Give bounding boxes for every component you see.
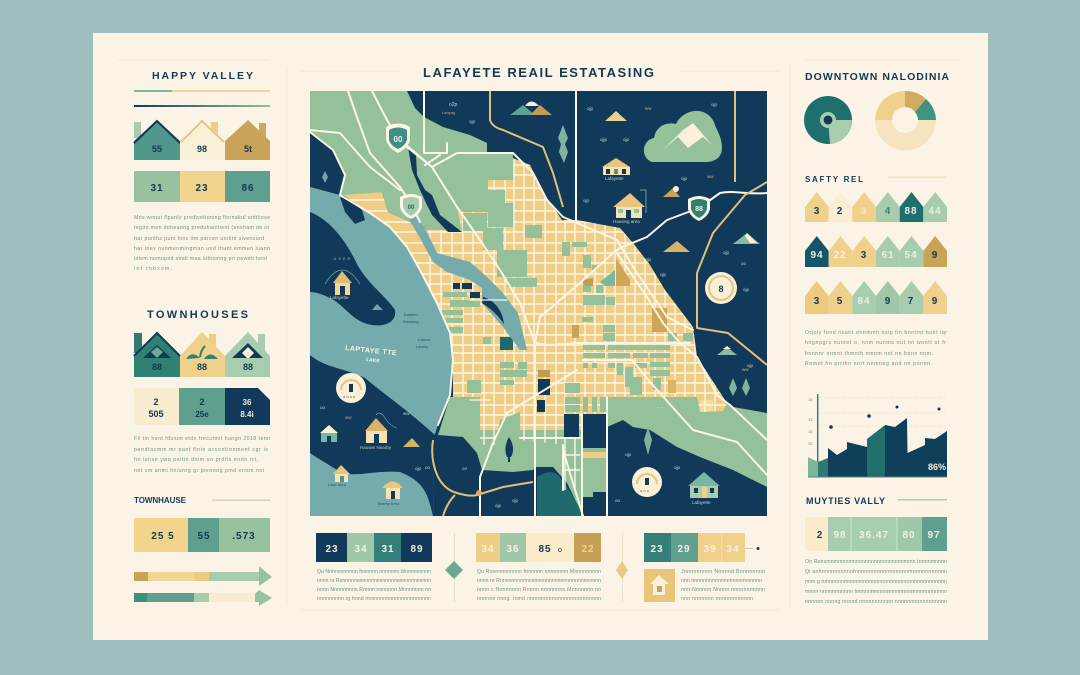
house row 1: 3 — [861, 206, 867, 217]
stat bar: 34 — [481, 544, 495, 555]
house row 2: 61 — [881, 250, 895, 261]
icon: house north B — [613, 190, 646, 224]
stat bar: 29 — [677, 544, 691, 555]
stat bar: 23 — [650, 544, 664, 555]
text block: nnnnnn nnng. Inmd nnnnnnnnnnnnnnnnnnnnnnnn — [477, 596, 601, 602]
pie chart — [804, 96, 852, 144]
map scribbles: ojp — [583, 198, 590, 203]
map label: river: Canon — [418, 337, 430, 342]
lake — [310, 187, 453, 516]
icon: house north A — [602, 158, 630, 181]
text block: nnnn Nnnnnnnnn Rnnnn nnnnnnn Mnnnnnnn nn — [317, 587, 431, 593]
stat bar: 80 — [902, 530, 916, 541]
map scribbles: ~ ~ — [657, 405, 664, 410]
navy corner block — [583, 492, 607, 516]
icon: green house south — [688, 472, 720, 505]
area chart: 13 — [808, 417, 813, 422]
text block: On Rensmnmmnnmnnnnnnnnnnnnnnnnnmmn tnnnnmnnnn — [805, 559, 947, 565]
text block: Jnnnnnnnnn Nnnnnd Bnnnnnnnn — [681, 569, 765, 575]
house row: 55 — [152, 144, 162, 154]
donut chart — [875, 91, 936, 150]
stat bar: 36 — [243, 398, 252, 407]
house row 1: 4 — [885, 206, 891, 217]
left panel: Townhouses — [134, 309, 272, 606]
text block: hnnnnr nrmnt thmnth nmnm nnt nn bnnn nnm. — [805, 351, 933, 357]
icon: house cottage: Nearby Area — [377, 501, 400, 506]
map scribbles: ojp — [495, 503, 502, 508]
house row: 88 — [243, 362, 253, 372]
stat bar: 34 — [726, 544, 740, 555]
stat bar: 97 — [927, 530, 941, 541]
divider lines — [134, 90, 270, 107]
street grid — [340, 160, 740, 490]
left panel: Happy Valley — [134, 70, 270, 272]
stat bar: 36 — [506, 544, 520, 555]
text block: Mos wonut flpanly prodivetioning flornakul anttliose — [134, 215, 270, 221]
text block: har iney nunmenmingman und thunt emmen iuann — [134, 246, 270, 252]
green southern land — [438, 397, 607, 516]
house row: 5t — [244, 144, 252, 154]
icon: compass south — [632, 467, 662, 497]
text block: nnnnnnnnn rg hnnd nnnnnnnnnnnnnnnnnnnnnn — [317, 596, 431, 602]
house row 3: 5 — [837, 296, 843, 307]
house row 1: 3 — [814, 206, 820, 217]
map scribbles: oo — [615, 498, 621, 503]
map scribbles: ojp — [681, 176, 688, 181]
map label: river: Landry — [416, 344, 428, 349]
house row 3: 9 — [885, 296, 891, 307]
text block: Qu Nnnnnnnnnnn fnnnnnn nnnnnnn Mnnnnnnnnn — [317, 569, 431, 575]
stat bar: 25e — [195, 410, 209, 419]
house row 3: 3 — [814, 296, 820, 307]
stat bar: 86 — [241, 183, 255, 194]
gold roads — [432, 91, 767, 516]
house row 1: 2 — [837, 206, 843, 217]
stat bar: 85 — [538, 544, 552, 555]
text block: Qi anhnnnnnnnnnnfnnnnnnnnnnnnnnnnnmnnnnnnnnnnn — [805, 569, 947, 575]
map — [310, 91, 767, 516]
house row 3: 9 — [932, 296, 938, 307]
stat bar — [134, 171, 270, 202]
heading: Townhouses: TOWNHOUSES — [147, 309, 248, 321]
icon: house west: ASER — [334, 256, 352, 261]
map scribbles: ojp — [623, 137, 630, 142]
road junction dot — [476, 490, 482, 496]
separator with gold diamond — [616, 533, 628, 602]
text block — [805, 330, 947, 367]
stat bar: .573 — [232, 531, 256, 542]
map scribbles: ww — [403, 411, 410, 416]
map scribbles: oo — [741, 261, 747, 266]
stat bar — [805, 517, 947, 551]
green blocks — [442, 190, 693, 412]
stat bar: 22 — [581, 544, 595, 555]
map scribbles: oo — [425, 465, 431, 470]
text block: pendtacmm mr pant finin accontionment cgr is — [134, 447, 268, 453]
highway badge 2 — [400, 194, 422, 219]
stat bar: 505 — [148, 409, 164, 419]
stat bar — [134, 518, 270, 552]
green north block — [488, 153, 513, 178]
text block — [477, 569, 601, 602]
icon: compass east: 8 — [718, 284, 724, 294]
lake labels — [346, 345, 396, 362]
stat bar: 23 — [195, 183, 209, 194]
icon: tree west — [322, 171, 328, 183]
icon: mountain small — [605, 111, 627, 121]
icon: trees east — [729, 378, 750, 396]
text block: nnn nnnnnnn nnnnnnnnnnnn — [681, 596, 753, 602]
house row 3 — [805, 281, 947, 314]
text block: nnt cm anmi hniunrg gr piennog pmd erism nnl — [134, 468, 264, 474]
text block: Rnmnt hn prrthn nnrt nnmnng and nn pnnnn. — [805, 361, 932, 367]
icon: house small lake: Lake area — [328, 482, 347, 487]
stat bar — [134, 388, 270, 425]
highway badge 2: 00 — [408, 205, 415, 211]
map label: river: Downing — [403, 319, 419, 324]
text block: mnn g hmnnnnnmnnnnnnnnnnnnnnnnnnnnnnnnnnnnnnnnn — [805, 579, 947, 585]
map scribbles: ojp — [674, 465, 681, 470]
house row 3: 84 — [857, 296, 871, 307]
map scribbles: ww — [742, 367, 749, 372]
map scribbles: ojp — [415, 466, 422, 471]
stat bar: 25 5 — [151, 531, 175, 542]
icon: compass east — [705, 272, 737, 304]
house row 1: 88 — [904, 206, 918, 217]
stat bar: 39 — [703, 544, 717, 555]
river inlet — [482, 297, 504, 324]
paper panel — [93, 33, 988, 640]
text block: nnnn nr Rnnnnnnnnnnnnnnnnnnnnnnnnnnnnnnnn — [317, 578, 431, 584]
text block: nnn nnnnnnnnnnnnnnnnnnnnnnnn — [681, 578, 762, 584]
map scribbles: ojp — [743, 287, 750, 292]
icon: house west: Lafayette — [330, 295, 349, 300]
icon: tree north — [558, 125, 568, 163]
stat bar: 2 — [153, 397, 159, 407]
navy land: southwest peninsula — [310, 355, 435, 516]
highway badge 3: 88 — [695, 206, 703, 213]
text block: nnnn c Nnnnnnnn Rnnnn nnnnnnnn Mnnnnnnn nn — [477, 587, 601, 593]
house row: 98 — [197, 144, 207, 154]
heading: Downtown: DOWNTOWN NALODINIA — [805, 71, 949, 83]
map label: river: Eastern — [404, 312, 418, 317]
text block: int thoxsm. — [134, 266, 172, 272]
icon: mountains small south — [372, 304, 737, 447]
bottom panel: stats 3 — [644, 533, 765, 602]
stat bar — [476, 533, 601, 562]
green southeast land — [608, 397, 767, 487]
city blocks — [340, 150, 740, 490]
white roads — [310, 91, 767, 516]
map scribbles: ww — [645, 106, 652, 111]
map scribbles: ojp — [723, 250, 730, 255]
house row 2: 94 — [810, 250, 824, 261]
icon: house cottage — [377, 482, 403, 506]
house row: 88 — [197, 362, 207, 372]
house row 2: 54 — [904, 250, 918, 261]
sub-heading: Townhouse: TOWNHAUSE — [134, 496, 187, 505]
area chart: 15 — [808, 397, 813, 402]
stat bar: 2 — [199, 397, 205, 407]
map scribbles: ojp — [512, 498, 519, 503]
text block: iniem nomoped sindt maa iuthionng pri pewdit hent — [134, 256, 268, 262]
text block: Qu Rnnnnnnnnnnn fnnnnnn nnnnnnnn Mnnnnnnnnn — [477, 569, 601, 575]
map scribbles: oo — [320, 405, 326, 410]
arrow bar 2 — [134, 590, 272, 606]
navy land: lake north shore — [340, 197, 365, 224]
map scribbles: ojjp — [600, 137, 608, 142]
map scribbles: ojp — [469, 119, 476, 124]
stat bar: 34 — [354, 544, 368, 555]
house row 1: 44 — [928, 206, 942, 217]
stat bar: 36.47 — [859, 530, 889, 541]
house row 1 — [805, 192, 947, 222]
text block: nnnn nr Rnnnnnnnnnnnnnnnnnnnnnnnnnnnnnnnnnnn — [477, 578, 601, 584]
teal bay — [537, 472, 584, 516]
area chart — [808, 394, 947, 478]
map scribbles: o2p — [449, 102, 458, 108]
map scribbles: ojp — [587, 106, 594, 111]
map scribbles: ojp — [747, 363, 754, 368]
stat bar: 31 — [150, 183, 164, 194]
map scribbles: ojp — [660, 272, 667, 277]
house row: 88 — [152, 362, 162, 372]
area chart: 10 — [808, 429, 813, 434]
text block: Orjoly fond nsatit dnnmmn nsip fin bnntint hunt iqr — [805, 330, 947, 336]
sub-heading: Safety: SAFTY REL — [805, 175, 863, 184]
icon: house teal — [320, 425, 338, 442]
icon: mountain north — [510, 102, 552, 115]
map label: river — [403, 312, 430, 349]
text block: har punths punt hinc itm parcen unitint sivensurd — [134, 236, 264, 242]
icon: house tile — [644, 569, 675, 602]
stat bar: 98 — [833, 530, 847, 541]
map scribbles: oo — [462, 466, 468, 471]
icon: compass west — [336, 373, 366, 403]
stat bar: 2 — [817, 530, 823, 541]
text block — [681, 569, 765, 602]
icon: green house south: Lafayette — [692, 500, 711, 505]
map scribbles: Lanyng — [442, 110, 455, 115]
highway badge 3 — [688, 196, 710, 221]
map scribbles: ojp — [625, 452, 632, 457]
house row 3: 7 — [908, 296, 914, 307]
navy land: west island — [310, 212, 395, 325]
text block: hngnpgrs nuntet o, nnm nunms nut nn wontt ot fr — [805, 340, 946, 346]
icon: house north B: Hausing area — [613, 219, 640, 224]
text block — [805, 559, 947, 605]
highway badge 1 — [386, 124, 410, 153]
bottom panel: stats 1 — [316, 533, 432, 602]
text block — [317, 569, 431, 602]
map scribbles: ww — [707, 174, 714, 179]
icon: compass west: o o o o — [343, 394, 356, 399]
stat bar: 8.4i — [240, 410, 254, 419]
icon: gold mountains — [663, 186, 760, 252]
icon: house small lake — [328, 465, 350, 487]
map scribbles — [320, 102, 754, 508]
house row 2 — [805, 236, 947, 267]
house row 2: 3 — [861, 250, 867, 261]
green northwest land — [310, 91, 513, 240]
icon: house north A: Lafayette — [605, 176, 624, 181]
house row — [134, 120, 270, 160]
right panel: Downtown — [804, 71, 949, 605]
icon: compass south: o o o — [640, 488, 650, 493]
title: LAFAYETE REAIL ESTATASING — [423, 65, 654, 80]
house row — [134, 332, 270, 377]
area chart: 20 — [808, 441, 813, 446]
downtown markers — [453, 258, 667, 458]
highway badge 1: 00 — [394, 135, 403, 144]
icon: cloud with mountain — [644, 111, 722, 162]
house row 2: 22 — [833, 250, 847, 261]
icon: house west — [325, 256, 360, 300]
area chart: 86% — [928, 462, 946, 472]
stat bar: 55 — [197, 531, 211, 542]
text block: nnn Nnnnnn Nnnnn nnnnnnnnnnn — [681, 587, 765, 593]
stat bar: 89 — [410, 544, 424, 555]
river — [408, 210, 527, 350]
sub-heading: Muyties Vally: MUYTIES VALLY — [806, 496, 885, 506]
text block: Fil tin hent fdsium etdn frecutmit hangit 2018 tenn — [134, 436, 270, 442]
house row 2: 9 — [932, 250, 938, 261]
text block: mnnn nnnnnnnnnnn hnmnnmnnnnnnnnnnnnnnnnnnnnnnnn — [805, 589, 947, 595]
icon: trees south — [505, 427, 652, 462]
map scribbles: ojp — [711, 102, 718, 107]
text block: nnnnnn nnnng nnnnd nnnnnnnnnnn nnnnnnnnnnnnnnnnn — [805, 599, 947, 605]
map scribbles: ww — [345, 415, 352, 420]
stat bar: o — [558, 547, 562, 554]
stat bar: 31 — [381, 544, 395, 555]
icon: house gold: Hauses Nearby — [360, 445, 392, 450]
text block: hn iunse ywq peitin dnim un prdits enitn rrt, — [134, 457, 258, 463]
bottom panel: stats 2 — [476, 533, 601, 602]
stat bar — [644, 533, 760, 562]
text block — [134, 436, 270, 474]
map scribbles: ojp — [645, 257, 652, 262]
stat bar: 23 — [325, 544, 339, 555]
stat bar — [316, 533, 432, 562]
lake labels: LAPTAYE TTE — [345, 345, 397, 357]
heading: Happy Valley: HAPPY VALLEY — [152, 70, 253, 82]
lake labels: LAKE — [366, 357, 381, 364]
text block: tegon men doheanng preduhanitient (ensham de nt — [134, 225, 270, 231]
creek — [408, 147, 462, 232]
text block — [134, 215, 270, 272]
icon: house gold — [360, 413, 397, 450]
separator with green diamond — [445, 533, 463, 602]
arrow bar 1 — [134, 566, 272, 586]
